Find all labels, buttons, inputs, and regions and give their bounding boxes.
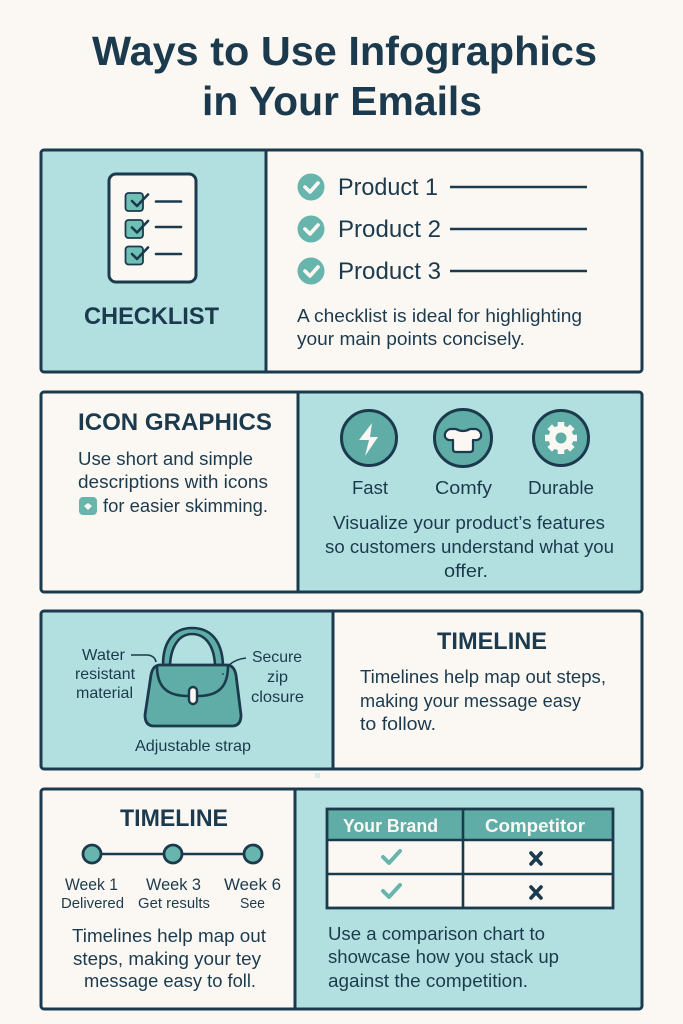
panel: icon graphics bbox=[41, 392, 642, 592]
text: timeline description: Timelines help map out steps, bbox=[360, 667, 606, 687]
icon labels bbox=[352, 477, 594, 498]
comparison chart: Your Brand bbox=[343, 816, 438, 836]
icon: t-shirt bbox=[434, 410, 492, 466]
icon labels: Fast bbox=[352, 477, 388, 498]
icon: checklist document bbox=[109, 174, 196, 282]
text: comparison description: Use a comparison chart to bbox=[328, 924, 545, 944]
callout: water resistant material bbox=[75, 647, 156, 702]
comparison chart: Competitor bbox=[485, 816, 585, 836]
text: product features description bbox=[325, 513, 614, 581]
panel: annotated product bbox=[41, 611, 642, 769]
callout: secure zip closure: Secure bbox=[252, 649, 302, 666]
checklist items: Product 1 bbox=[338, 174, 438, 201]
icon: handbag bbox=[145, 628, 241, 726]
timeline chart: Week 6 bbox=[224, 876, 281, 894]
callout: water resistant material: resistant bbox=[75, 666, 136, 683]
text: checklist description: your main points concisely. bbox=[297, 329, 525, 349]
text: timeline description: Timelines help map out bbox=[72, 926, 266, 946]
title bbox=[92, 28, 597, 124]
text: icon graphics description: descriptions with icons bbox=[78, 472, 268, 492]
comparison chart bbox=[327, 809, 613, 908]
callout: adjustable strap: Adjustable strap bbox=[135, 738, 251, 755]
heading: timeline: TIMELINE bbox=[120, 805, 228, 832]
text: checklist description: A checklist is ideal for highlighting bbox=[297, 306, 582, 326]
title: Ways to Use Infographics bbox=[92, 28, 597, 74]
text: timeline description: steps, making your tey bbox=[73, 949, 261, 969]
text: comparison description: against the competition. bbox=[328, 971, 528, 991]
icon labels: Comfy bbox=[435, 477, 493, 498]
text: comparison description: showcase how you stack up bbox=[328, 947, 559, 967]
text: timeline description: to follow. bbox=[360, 714, 436, 734]
icon: lightning bolt bbox=[342, 410, 396, 466]
timeline chart: Delivered bbox=[61, 895, 124, 912]
icon: inline diamond bbox=[79, 497, 97, 515]
heading: timeline: TIMELINE bbox=[437, 628, 547, 655]
text: comparison description bbox=[328, 924, 559, 991]
text: product features description: so customers understand what you bbox=[325, 537, 614, 557]
text: product features description: offer. bbox=[444, 561, 488, 581]
text: icon graphics description: Use short and simple bbox=[78, 449, 253, 469]
callout: water resistant material: Water bbox=[82, 647, 126, 664]
text: product features description: Visualize your product’s features bbox=[333, 513, 605, 533]
icon: gear bbox=[534, 410, 588, 466]
callout: secure zip closure: zip bbox=[267, 669, 288, 686]
panel: timeline and comparison bbox=[41, 789, 642, 1009]
text: timeline description: making your message easy bbox=[360, 691, 581, 711]
text: checklist description bbox=[297, 306, 582, 349]
timeline chart bbox=[61, 845, 281, 912]
checklist items: Product 2 bbox=[338, 216, 441, 243]
title: in Your Emails bbox=[202, 78, 482, 124]
callout: secure zip closure bbox=[229, 649, 304, 706]
timeline chart: Week 3 bbox=[146, 876, 201, 894]
text: timeline description: message easy to foll. bbox=[84, 971, 256, 991]
text: icon graphics description: for easier skimming. bbox=[103, 496, 268, 516]
text: timeline description bbox=[72, 926, 266, 991]
text: timeline description bbox=[360, 667, 606, 734]
callout: water resistant material: material bbox=[76, 685, 133, 702]
callout: secure zip closure: closure bbox=[251, 689, 304, 706]
heading: checklist: CHECKLIST bbox=[84, 303, 219, 330]
timeline chart: See bbox=[240, 895, 265, 912]
timeline chart: Get results bbox=[138, 895, 210, 912]
checklist items bbox=[298, 174, 587, 285]
icon labels: Durable bbox=[528, 477, 594, 498]
panel: checklist bbox=[41, 150, 642, 372]
checklist items: Product 3 bbox=[338, 258, 441, 285]
timeline chart: Week 1 bbox=[65, 876, 118, 894]
heading: icon graphics: ICON GRAPHICS bbox=[78, 409, 272, 436]
text: icon graphics description bbox=[78, 449, 268, 516]
